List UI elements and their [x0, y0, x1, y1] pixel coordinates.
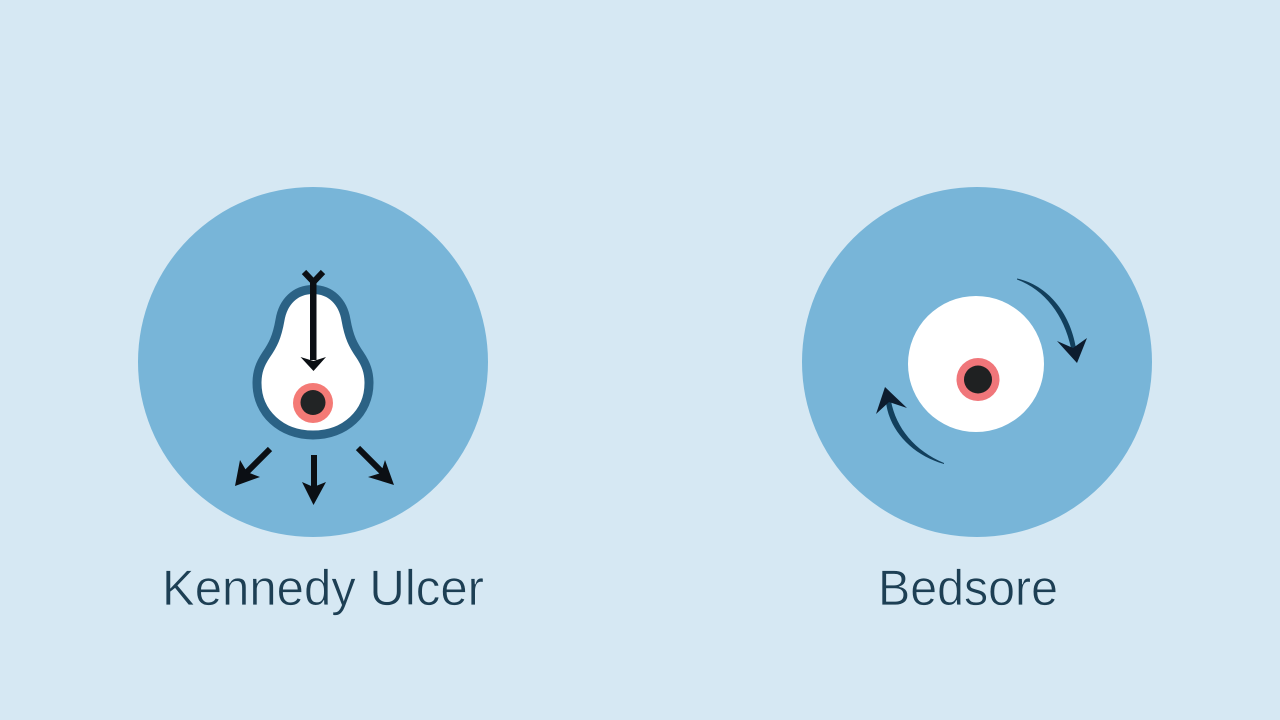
red ring with black core: [956, 358, 1000, 401]
central downward arrow: [300, 272, 326, 371]
panel: Kennedy Ulcer diagram: [138, 187, 488, 537]
arrow: down left: [235, 449, 270, 486]
arrow: down right: [358, 448, 394, 485]
white round wound: [908, 296, 1044, 432]
blue disc: Kennedy Ulcer: [138, 187, 488, 537]
blue disc: Bedsore: [802, 187, 1152, 537]
label: Kennedy Ulcer: Kennedy Ulcer: [162, 560, 484, 616]
arrow: down: [302, 455, 326, 505]
curved arrow: clockwise lower left: [876, 387, 944, 464]
red ring with black core: [293, 383, 333, 423]
curved arrow: clockwise upper right: [1017, 278, 1087, 363]
panel: Bedsore diagram: [802, 187, 1152, 537]
label: Bedsore: Bedsore: [878, 560, 1058, 616]
pear-shaped white wound with dark outline: [257, 290, 369, 435]
